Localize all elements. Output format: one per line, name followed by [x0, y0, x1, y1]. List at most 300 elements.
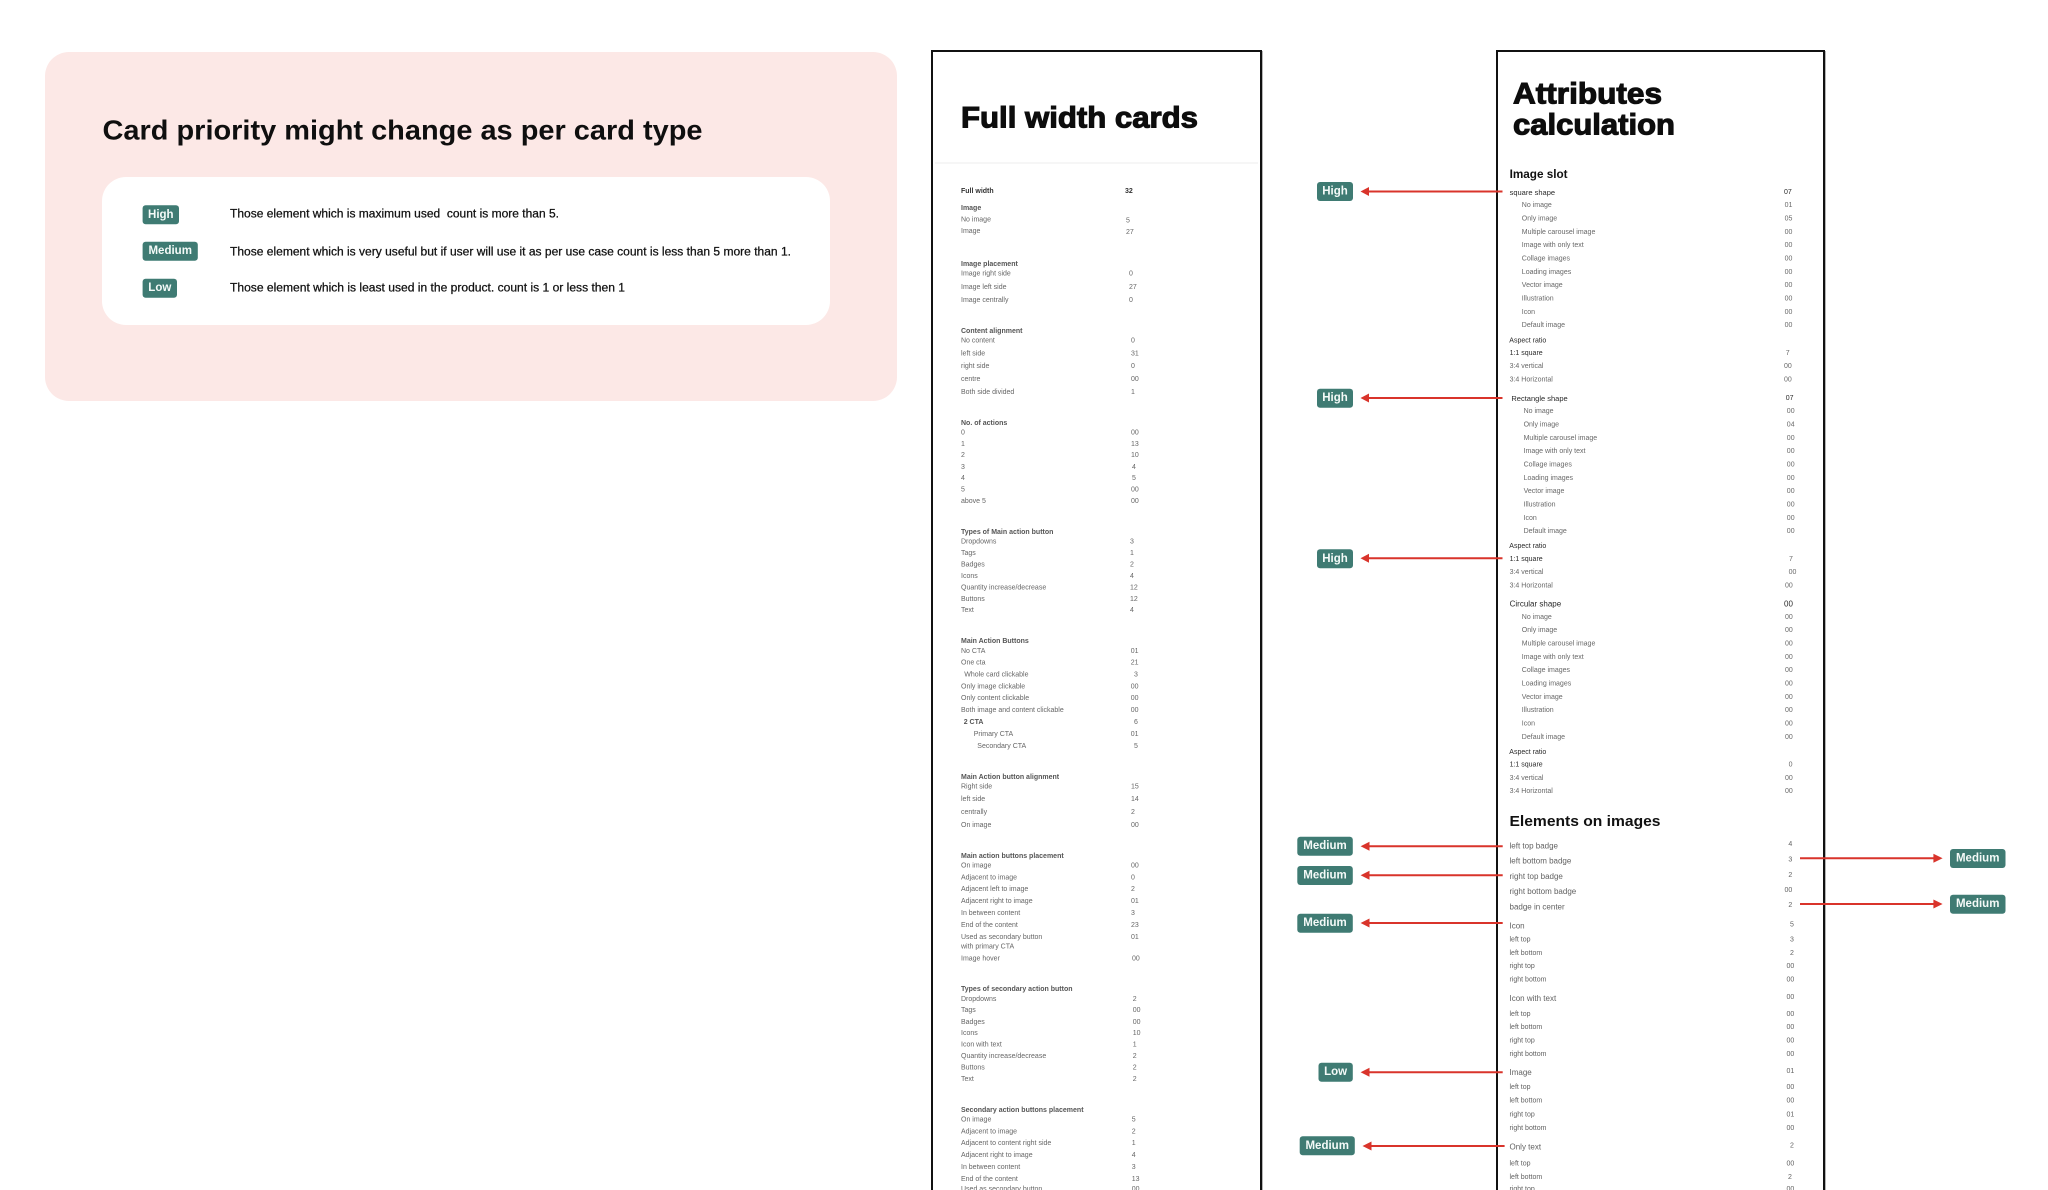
badge: medium left top badge: [1297, 837, 1353, 856]
section: main action button alignment: Main Action button alignment: [961, 774, 1060, 781]
group: square shape: 07: [1784, 189, 1792, 196]
section: types of secondary action button: Icons: [961, 1030, 978, 1037]
group: rectangle aspect ratio: 00: [1789, 569, 1796, 576]
group: square shape: 00: [1785, 296, 1792, 302]
group: image element: right bottom: [1510, 1125, 1547, 1132]
arrow: image to low: [1361, 1068, 1503, 1077]
heading: attributes calculation: calculation: [1513, 108, 1675, 142]
section: types of main action button: Tags: [961, 550, 976, 557]
section: number of actions: 0: [961, 430, 965, 436]
section: content alignment: 1: [1131, 389, 1135, 396]
group: rectangle shape: Illustration: [1524, 502, 1556, 508]
section: content alignment: Content alignment: [961, 328, 1023, 335]
section: number of actions: 4: [1132, 464, 1136, 471]
section: image placement: Image placement: [961, 261, 1018, 268]
group: only text: left bottom: [1510, 1174, 1542, 1181]
badge: medium icon: [1297, 914, 1353, 933]
section: main action buttons: 01: [1131, 648, 1139, 655]
section: main action buttons: 01: [1131, 731, 1139, 738]
text: high definition: Those element which is maximum used count is more than 5.: [230, 209, 559, 221]
group: badges: 3: [1788, 856, 1792, 863]
subheading: image slot: Image slot: [1510, 167, 1568, 181]
section: number of actions: 2: [961, 452, 965, 459]
group: circular shape: Only image: [1522, 627, 1557, 634]
group: square shape: 00: [1785, 269, 1792, 276]
section: types of main action button: Badges: [961, 562, 985, 568]
group: square shape: [1510, 188, 1792, 329]
section: types of main action button: 12: [1130, 584, 1138, 592]
group: rectangle aspect ratio: 3:4 Horizontal: [1510, 582, 1553, 590]
section: types of secondary action button: 2: [1133, 1053, 1137, 1060]
section: image placement: [961, 261, 1137, 304]
section: main action button alignment: 14: [1131, 796, 1139, 803]
group: square aspect ratio: 00: [1784, 363, 1792, 370]
section: image: No image: [961, 216, 991, 224]
group: rectangle aspect ratio: Aspect ratio: [1509, 543, 1546, 550]
group: circular shape: 00: [1785, 734, 1793, 741]
section: image: 27: [1126, 229, 1134, 236]
heading: attributes calculation: Attributes: [1513, 78, 1662, 110]
group: image element: 00: [1786, 1097, 1794, 1104]
group: rectangle shape: 00: [1787, 475, 1795, 482]
group: rectangle shape: Icon: [1524, 515, 1537, 522]
group: circular aspect ratio: 3:4 Horizontal: [1510, 788, 1553, 795]
badge: medium: Medium: [148, 245, 192, 257]
section: secondary action buttons placement: 5: [1132, 1116, 1136, 1124]
group: circular shape: 00: [1785, 667, 1793, 674]
panel: card priority legend: [45, 52, 897, 401]
section: main action buttons placement: with primary CTA: [960, 944, 1014, 950]
section: types of secondary action button: Buttons: [961, 1064, 985, 1072]
badge: medium left bottom badge: [1950, 849, 2006, 868]
group: rectangle shape: [1511, 394, 1795, 535]
section: main action buttons: Only content clickable: [961, 695, 1029, 702]
section: number of actions: 10: [1131, 452, 1139, 459]
section: content alignment: 00: [1131, 376, 1139, 383]
group: icon: 5: [1790, 921, 1794, 928]
group: image element: 01: [1786, 1111, 1794, 1118]
section: main action button alignment: [961, 774, 1139, 829]
section: types of main action button: 3: [1130, 538, 1134, 546]
group: circular shape: Default image: [1522, 734, 1565, 741]
group: rectangle shape: 00: [1787, 435, 1795, 442]
group: rectangle shape: 00: [1787, 408, 1795, 415]
group: icon with text: right top: [1510, 1037, 1535, 1044]
arrow: left bottom badge to medium: [1800, 854, 1943, 863]
section: main action buttons placement: Main action buttons placement: [961, 853, 1064, 860]
group: square shape: Icon: [1522, 309, 1535, 316]
section: image placement: 0: [1129, 270, 1133, 278]
section: image placement: Image left side: [961, 284, 1007, 291]
group: icon with text: 00: [1786, 1037, 1794, 1044]
section: types of secondary action button: 2: [1133, 1064, 1137, 1072]
section: main action buttons: 6: [1134, 719, 1138, 726]
group: circular shape: 00: [1785, 694, 1793, 701]
section: main action buttons: Whole card clickable: [964, 672, 1029, 678]
group: circular shape: 00: [1784, 600, 1793, 608]
section: secondary action buttons placement: [961, 1107, 1140, 1190]
group: rectangle shape: 00: [1787, 502, 1795, 508]
badge: medium right top badge: [1297, 866, 1353, 885]
group: rectangle shape: 04: [1787, 422, 1795, 428]
section: number of actions: 1: [961, 441, 965, 448]
group: square shape: 00: [1785, 309, 1792, 316]
section: image placement: 27: [1129, 284, 1137, 291]
badge: low image: Low: [1324, 1066, 1347, 1078]
section: image placement: 0: [1129, 297, 1133, 304]
section: main action buttons placement: Image hover: [961, 956, 1001, 962]
group: circular shape: [1510, 600, 1793, 741]
section: number of actions: 00: [1131, 486, 1139, 494]
group: circular aspect ratio: 00: [1785, 788, 1793, 795]
group: rectangle shape: Multiple carousel image: [1524, 435, 1597, 442]
group: circular shape: Illustration: [1522, 707, 1554, 714]
section: content alignment: 0: [1131, 363, 1135, 370]
group: only text: 2: [1788, 1174, 1792, 1181]
section: types of secondary action button: Text: [961, 1076, 974, 1083]
group: circular aspect ratio: 0: [1789, 762, 1793, 768]
section: types of main action button: 2: [1130, 562, 1134, 568]
group: square shape: 00: [1785, 282, 1792, 289]
group: rectangle shape: Loading images: [1524, 475, 1574, 482]
section: image: Image: [961, 205, 981, 212]
section: secondary action buttons placement: Adjacent right to image: [961, 1152, 1033, 1159]
section: main action buttons: Primary CTA: [974, 731, 1014, 738]
group: rectangle shape: 00: [1787, 515, 1795, 522]
group: icon with text: 00: [1786, 1051, 1794, 1058]
group: circular aspect ratio: Aspect ratio: [1509, 749, 1546, 756]
section: types of secondary action button: Types of secondary action button: [961, 986, 1072, 993]
group: icon: right bottom: [1510, 976, 1547, 983]
group: square aspect ratio: Aspect ratio: [1509, 338, 1546, 344]
section: main action buttons: One cta: [961, 660, 986, 666]
section: types of secondary action button: Tags: [961, 1007, 976, 1014]
group: square shape: Multiple carousel image: [1522, 229, 1595, 236]
group: icon: 3: [1790, 936, 1794, 943]
group: icon with text: 00: [1786, 994, 1794, 1001]
section: types of main action button: Buttons: [961, 596, 985, 603]
section: content alignment: 0: [1131, 338, 1135, 344]
group: icon with text: 00: [1786, 1024, 1794, 1031]
arrow: right top badge to medium: [1361, 871, 1503, 880]
group: rectangle shape: Image with only text: [1524, 448, 1586, 455]
group: rectangle shape: Vector image: [1524, 488, 1565, 495]
group: icon with text: [1510, 994, 1794, 1058]
group: square shape: Only image: [1522, 216, 1557, 222]
group: square shape: Loading images: [1522, 269, 1572, 276]
section: number of actions: 3: [961, 464, 965, 471]
arrow: 1:1 square to high: [1360, 554, 1502, 563]
section: image: [961, 205, 1134, 236]
section: main action buttons placement: In between content: [961, 910, 1020, 917]
section: types of main action button: Icons: [961, 573, 978, 580]
section: secondary action buttons placement: Adjacent to content right side: [961, 1140, 1051, 1147]
section: types of main action button: Text: [961, 607, 974, 614]
group: square aspect ratio: [1509, 338, 1792, 384]
total: full width: Full width: [961, 188, 994, 195]
badge: high: High: [148, 209, 174, 221]
group: circular aspect ratio: [1509, 749, 1793, 795]
group: square shape: 00: [1785, 229, 1792, 236]
section: number of actions: 13: [1131, 441, 1139, 448]
section: types of secondary action button: Dropdowns: [961, 996, 997, 1003]
section: main action button alignment: Right side: [961, 784, 992, 790]
group: badges: right top badge: [1510, 872, 1563, 881]
group: circular shape: 00: [1785, 720, 1793, 728]
subheading: elements on images: Elements on images: [1510, 813, 1660, 830]
group: rectangle shape: 00: [1787, 488, 1795, 495]
group: circular shape: No image: [1522, 614, 1552, 621]
section: content alignment: 31: [1131, 350, 1139, 358]
text: medium definition: Those element which is very useful but if user will use it as per use case count is less than 5 more than 1.: [230, 246, 791, 258]
section: content alignment: No content: [961, 338, 995, 344]
panel: full width cards: [932, 51, 1262, 1190]
group: circular shape: 00: [1785, 654, 1793, 661]
group: image element: 01: [1786, 1068, 1794, 1075]
section: content alignment: [961, 328, 1139, 396]
section: main action button alignment: left side: [961, 796, 985, 803]
group: square shape: Collage images: [1522, 256, 1571, 262]
group: rectangle aspect ratio: 1:1 square: [1510, 556, 1543, 563]
section: main action buttons: Main Action Buttons: [961, 638, 1029, 645]
group: circular shape: 00: [1785, 680, 1793, 688]
section: main action buttons placement: 01: [1131, 934, 1139, 941]
group: square shape: Vector image: [1522, 282, 1563, 289]
group: rectangle aspect ratio: 3:4 vertical: [1510, 569, 1544, 576]
section: types of main action button: Dropdowns: [961, 538, 997, 546]
section: types of secondary action button: 2: [1133, 996, 1137, 1003]
section: types of secondary action button: 10: [1133, 1030, 1141, 1037]
heading: attributes calculation: [1513, 78, 1675, 142]
section: main action button alignment: centrally: [961, 809, 988, 816]
group: icon with text: Icon with text: [1510, 994, 1557, 1003]
section: main action buttons placement: 00: [1131, 862, 1139, 870]
group: circular aspect ratio: 00: [1785, 775, 1793, 782]
badge: medium only text: Medium: [1305, 1140, 1349, 1152]
section: main action buttons placement: Used as secondary button: [961, 934, 1042, 941]
badge: high rectangle shape: [1317, 389, 1353, 408]
section: main action button alignment: On image: [961, 822, 991, 829]
section: types of main action button: [961, 529, 1138, 614]
group: circular shape: Loading images: [1522, 680, 1572, 688]
arrow: only text to medium: [1362, 1142, 1505, 1150]
section: main action button alignment: 2: [1131, 809, 1135, 816]
section: types of secondary action button: Badges: [961, 1019, 985, 1026]
section: main action button alignment: 15: [1131, 784, 1139, 790]
group: icon: 2: [1790, 950, 1794, 957]
group: icon: left top: [1510, 936, 1531, 943]
group: rectangle shape: No image: [1524, 408, 1554, 415]
section: content alignment: left side: [961, 350, 985, 358]
badge: medium badge in center: Medium: [1956, 898, 1999, 910]
group: square shape: 00: [1785, 256, 1792, 262]
section: main action buttons: 00: [1131, 684, 1139, 690]
arrow: square shape to high: [1360, 187, 1502, 196]
section: secondary action buttons placement: 13: [1132, 1176, 1140, 1183]
group: only text: 00: [1786, 1160, 1794, 1167]
group: circular shape: Icon: [1522, 720, 1535, 728]
group: image element: left top: [1510, 1084, 1531, 1091]
group: only text: 2: [1790, 1142, 1794, 1149]
group: square shape: 00: [1785, 322, 1792, 329]
group: badges: [1510, 841, 1792, 911]
group: icon: 00: [1786, 976, 1794, 983]
section: main action buttons placement: On image: [961, 862, 991, 870]
section: image: 5: [1126, 218, 1130, 224]
group: only text: Only text: [1510, 1142, 1542, 1151]
group: icon with text: left bottom: [1510, 1024, 1542, 1031]
group: icon: [1510, 921, 1794, 983]
badge: low: Low: [148, 282, 171, 294]
section: main action buttons: Both image and content clickable: [961, 707, 1064, 714]
section: main action buttons: 3: [1134, 672, 1138, 678]
section: types of main action button: Quantity increase/decrease: [961, 584, 1046, 592]
group: badges: 2: [1788, 902, 1792, 909]
arrow: left top badge to medium: [1361, 842, 1503, 851]
group: only text: [1510, 1142, 1794, 1190]
group: icon: right top: [1510, 963, 1535, 970]
group: circular shape: Multiple carousel image: [1522, 640, 1595, 648]
section: main action buttons placement: 23: [1131, 922, 1139, 929]
badge: low image: [1318, 1063, 1353, 1082]
section: number of actions: 4: [961, 475, 965, 482]
section: number of actions: [961, 420, 1139, 505]
group: badges: left bottom badge: [1510, 856, 1572, 865]
badge: medium badge in center: [1950, 895, 2006, 914]
group: image element: [1510, 1068, 1794, 1132]
group: icon with text: left top: [1510, 1011, 1531, 1018]
section: main action button alignment: 00: [1131, 822, 1139, 829]
panel: priority definitions: [102, 177, 830, 325]
section: number of actions: 00: [1131, 430, 1139, 436]
heading: card priority: Card priority might change as per card type: [102, 114, 702, 146]
section: image: Image: [961, 228, 981, 235]
section: secondary action buttons placement: Adjacent to image: [961, 1128, 1017, 1136]
group: square aspect ratio: 1:1 square: [1510, 350, 1543, 357]
group: circular shape: Circular shape: [1510, 600, 1562, 608]
badge: low: [143, 279, 177, 298]
section: types of main action button: 4: [1130, 573, 1134, 580]
badge: medium right top badge: Medium: [1303, 870, 1347, 882]
section: types of secondary action button: Icon with text: [961, 1042, 1002, 1048]
group: icon: 00: [1786, 963, 1794, 970]
group: circular aspect ratio: 1:1 square: [1510, 762, 1543, 768]
group: circular aspect ratio: 3:4 vertical: [1510, 775, 1544, 782]
group: image element: right top: [1510, 1111, 1535, 1118]
section: main action buttons: Only image clickable: [961, 684, 1025, 690]
text: low definition: Those element which is least used in the product. count is 1 or less then 1: [230, 282, 625, 294]
section: types of main action button: 12: [1130, 596, 1138, 603]
group: circular shape: 00: [1785, 614, 1793, 621]
section: main action buttons placement: 01: [1131, 898, 1139, 905]
section: types of secondary action button: 00: [1133, 1007, 1141, 1014]
group: image element: left bottom: [1510, 1097, 1542, 1104]
section: number of actions: 00: [1131, 498, 1139, 505]
section: image placement: Image centrally: [961, 297, 1009, 304]
section: main action buttons placement: Adjacent to image: [961, 874, 1017, 882]
section: main action buttons: No CTA: [961, 648, 986, 655]
section: types of main action button: 4: [1130, 607, 1134, 614]
section: image placement: Image right side: [961, 270, 1011, 278]
group: image element: Image: [1510, 1068, 1532, 1077]
section: types of secondary action button: 00: [1133, 1019, 1141, 1026]
group: square shape: Image with only text: [1522, 242, 1584, 249]
section: number of actions: 5: [1132, 475, 1136, 482]
section: content alignment: centre: [961, 376, 981, 383]
section: main action buttons: Secondary CTA: [977, 743, 1027, 750]
heading: full width cards: Full width cards: [961, 102, 1198, 134]
group: circular shape: 00: [1785, 707, 1793, 714]
section: secondary action buttons placement: 1: [1132, 1140, 1136, 1147]
group: square shape: No image: [1522, 202, 1552, 209]
section: main action buttons placement: 2: [1131, 886, 1135, 893]
group: square aspect ratio: 00: [1784, 376, 1792, 384]
total: full width: 32: [1125, 188, 1133, 195]
badge: high square shape: [1317, 182, 1353, 201]
group: badges: 00: [1784, 887, 1792, 894]
section: secondary action buttons placement: On image: [961, 1116, 991, 1124]
group: rectangle shape: Rectangle shape: [1511, 394, 1568, 403]
section: main action buttons placement: 0: [1131, 874, 1135, 882]
section: main action buttons placement: End of the content: [961, 922, 1018, 929]
group: square shape: 05: [1785, 216, 1792, 222]
section: types of secondary action button: Quantity increase/decrease: [961, 1053, 1046, 1060]
group: square shape: square shape: [1510, 188, 1555, 197]
group: image element: 00: [1786, 1125, 1794, 1132]
section: main action buttons: [961, 638, 1139, 750]
badge: medium only text: [1300, 1136, 1355, 1155]
group: square aspect ratio: 3:4 Horizontal: [1510, 376, 1553, 384]
group: icon: Icon: [1510, 921, 1525, 930]
panel: attributes calculation: [1497, 51, 1825, 1190]
badge: high square shape: High: [1322, 186, 1348, 198]
section: main action buttons placement: 00: [1132, 956, 1140, 962]
group: rectangle shape: 00: [1787, 528, 1795, 535]
badge: high: [143, 205, 179, 224]
arrow: badge in center to medium: [1800, 900, 1943, 908]
group: badges: badge in center: [1510, 902, 1565, 911]
section: secondary action buttons placement: End of the content: [961, 1176, 1018, 1183]
group: circular shape: 00: [1785, 627, 1793, 634]
group: square aspect ratio: 3:4 vertical: [1510, 363, 1544, 370]
section: main action buttons: 00: [1131, 707, 1139, 714]
section: number of actions: 5: [961, 486, 965, 494]
badge: high 1:1 square: High: [1322, 553, 1348, 565]
group: square shape: Illustration: [1522, 296, 1554, 302]
section: secondary action buttons placement: 3: [1132, 1164, 1136, 1171]
group: badges: 2: [1788, 872, 1792, 879]
group: circular shape: 00: [1785, 640, 1793, 648]
section: main action buttons: 00: [1131, 695, 1139, 702]
group: rectangle shape: 07: [1786, 395, 1794, 402]
group: rectangle aspect ratio: 7: [1789, 556, 1793, 563]
badge: high rectangle shape: High: [1322, 392, 1348, 404]
section: types of secondary action button: 2: [1133, 1076, 1137, 1083]
group: badges: right bottom badge: [1510, 887, 1577, 896]
section: secondary action buttons placement: 4: [1132, 1152, 1136, 1159]
section: main action buttons placement: Adjacent right to image: [961, 898, 1033, 905]
section: types of main action button: Types of Main action button: [961, 529, 1053, 536]
section: main action buttons placement: Adjacent left to image: [961, 886, 1028, 893]
group: rectangle aspect ratio: [1509, 543, 1796, 590]
group: rectangle shape: Default image: [1524, 528, 1567, 535]
section: types of secondary action button: 1: [1133, 1042, 1137, 1048]
group: circular shape: Vector image: [1522, 694, 1563, 701]
section: content alignment: Both side divided: [961, 389, 1014, 396]
section: main action buttons placement: [960, 853, 1140, 962]
group: only text: left top: [1510, 1160, 1531, 1167]
badge: medium left top badge: Medium: [1303, 840, 1347, 852]
